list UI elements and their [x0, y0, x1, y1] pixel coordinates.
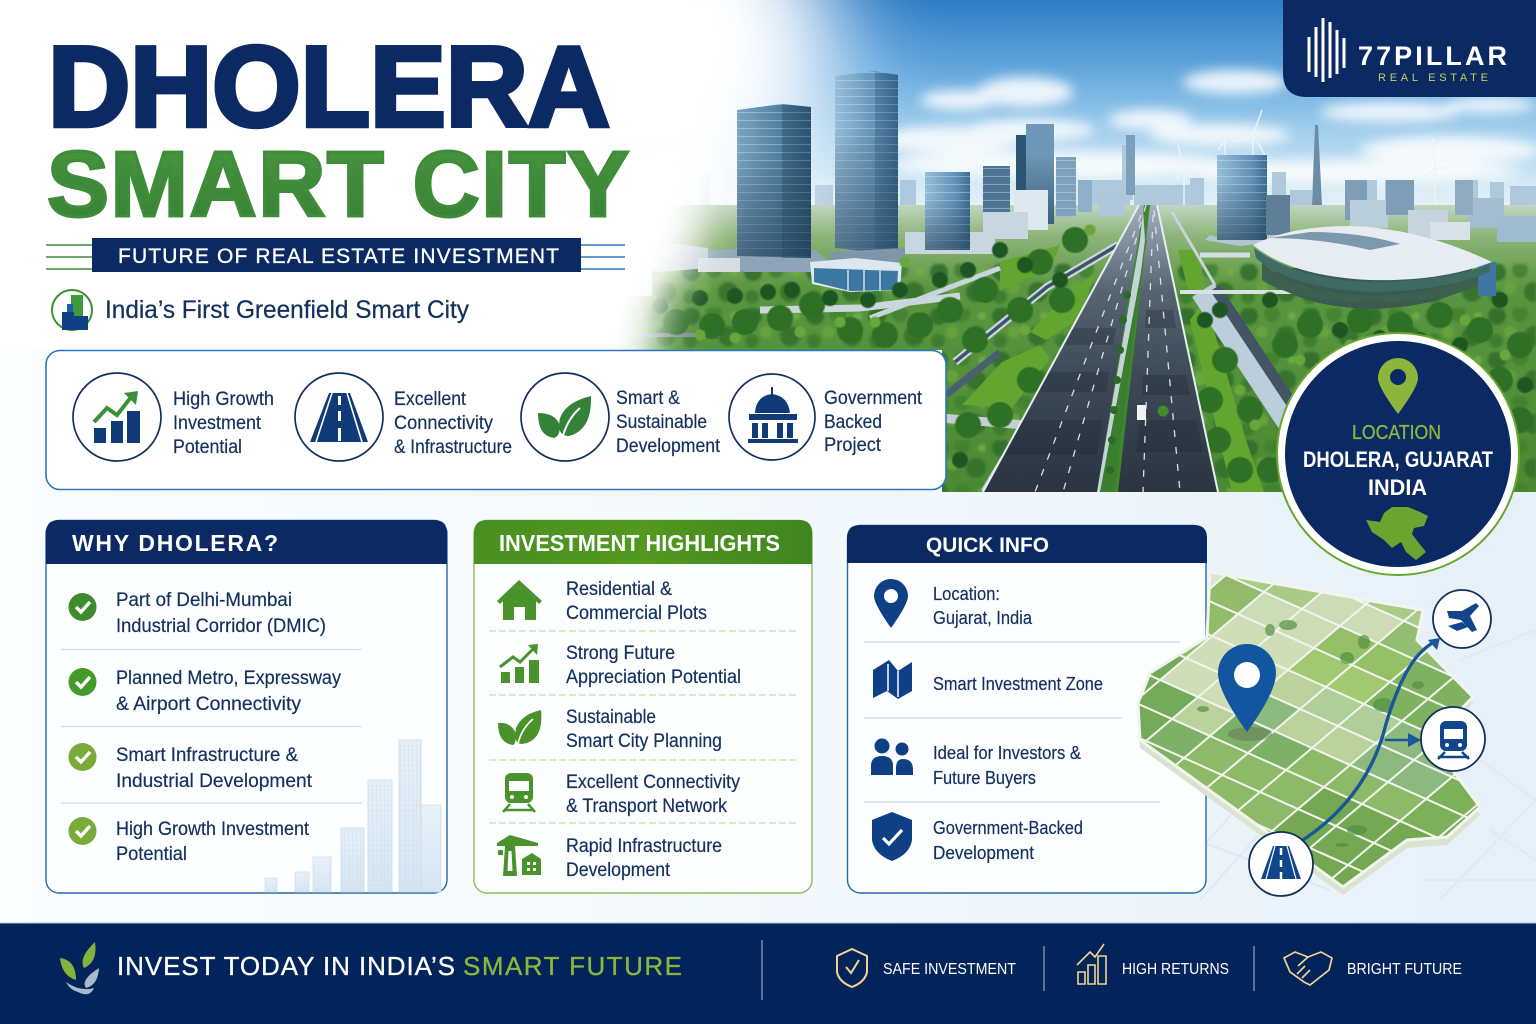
item: transport: Excellent Connectivity [566, 772, 740, 793]
item: growth [68, 817, 310, 865]
item: sustainable: Sustainable [566, 707, 656, 728]
feature: high growth [73, 373, 274, 461]
sky fade to white [600, 0, 911, 205]
footer call to action [117, 951, 682, 981]
item: investors: Ideal for Investors & [933, 743, 1081, 763]
feature: high growth: Potential [173, 437, 242, 458]
item: metro [68, 668, 341, 715]
item: government: Government-Backed [933, 818, 1083, 838]
item: plots: Commercial Plots [566, 603, 707, 624]
header [847, 525, 1207, 563]
logo [1283, 0, 1536, 97]
logo text: 77PILLAR [1358, 41, 1507, 71]
title [47, 24, 629, 236]
logo text [1358, 41, 1507, 84]
Gujarat outline [1366, 507, 1428, 560]
feature: government: Project [824, 435, 882, 456]
item: government: Development [933, 843, 1034, 863]
item: infrastructure [68, 743, 313, 792]
map pin [1218, 644, 1276, 741]
map base [1138, 645, 1480, 895]
header [474, 520, 812, 564]
item: appreciation: Strong Future [566, 643, 675, 664]
item: DMIC: Industrial Corridor (DMIC) [116, 616, 326, 637]
road badge [1249, 832, 1313, 896]
item: appreciation: Appreciation Potential [566, 667, 741, 688]
feature: sustainable [521, 373, 721, 461]
item: location: Gujarat, India [933, 608, 1033, 628]
header: INVESTMENT HIGHLIGHTS [499, 530, 780, 556]
arrowheads [1408, 638, 1440, 747]
subtitle with city icon: India’s First Greenfield Smart City [105, 296, 469, 324]
foreground trees [660, 230, 1525, 470]
tree canopy texture [600, 262, 1536, 492]
panel: quick info [847, 525, 1207, 893]
road shadow bands [1014, 310, 1199, 438]
feature: government [729, 374, 923, 460]
item: metro: Planned Metro, Expressway [116, 668, 341, 689]
location text: DHOLERA, GUJARAT [1303, 447, 1493, 472]
badge: high returns [1077, 944, 1229, 984]
dividers [61, 650, 362, 803]
badge: bright future [1284, 952, 1462, 985]
item: infrastructure: Industrial Development [116, 771, 313, 792]
ground [600, 205, 1536, 492]
item: government [872, 812, 1083, 863]
location text: INDIA [1368, 475, 1427, 500]
item: infrastructure: Smart Infrastructure & [116, 745, 298, 766]
panel: key features [46, 350, 946, 490]
item: metro: & Airport Connectivity [116, 694, 302, 715]
feature: connectivity: & Infrastructure [394, 437, 512, 458]
panel: why dholera [46, 520, 447, 893]
feature: sustainable: Development [616, 436, 721, 457]
badge: safe investment: SAFE INVESTMENT [883, 961, 1016, 978]
map outline [1138, 572, 1480, 887]
faint background roads [1170, 630, 1536, 900]
subtitle with city icon [52, 290, 469, 330]
item: zone: Smart Investment Zone [933, 674, 1103, 694]
item: plots [497, 579, 707, 624]
footer call to action: INVEST TODAY IN INDIA’S [117, 951, 455, 981]
dividers [864, 642, 1180, 802]
location pin [1378, 358, 1418, 414]
clouds [880, 70, 1536, 184]
item: plots: Residential & [566, 579, 672, 600]
feature: government: Backed [824, 412, 882, 433]
logo pillars [1309, 18, 1344, 82]
low buildings [636, 244, 740, 296]
footer call to action: SMART FUTURE [463, 951, 682, 981]
airport badge [1433, 590, 1491, 648]
map plots [1140, 574, 1478, 885]
feature: connectivity: Connectivity [394, 413, 493, 434]
tower one [708, 104, 828, 272]
badge: safe investment [837, 949, 1016, 987]
feature: connectivity [295, 373, 512, 461]
item: DMIC: Part of Delhi-Mumbai [116, 590, 292, 611]
side roads [640, 212, 1300, 492]
feature: high growth: High Growth [173, 389, 274, 410]
dashed dividers [489, 631, 797, 823]
white top left area [0, 0, 640, 350]
item: infrastructure [497, 835, 722, 881]
item: transport [503, 772, 740, 817]
location text: LOCATION [1352, 422, 1441, 444]
feature: high growth: Investment [173, 413, 262, 434]
sky [734, 0, 1536, 205]
lawns [962, 245, 1264, 492]
header: QUICK INFO [926, 534, 1049, 557]
footer leaf icon [60, 942, 99, 994]
panel: investment highlights [474, 520, 812, 893]
badge: bright future: BRIGHT FUTURE [1347, 961, 1462, 978]
item: infrastructure: Development [566, 860, 671, 881]
logo text: REAL ESTATE [1378, 72, 1488, 84]
location badge [1277, 333, 1519, 575]
item: sustainable [498, 707, 722, 752]
trees on map [1197, 620, 1424, 847]
connection route [1303, 641, 1436, 840]
train badge [1421, 707, 1485, 771]
stadium [1253, 226, 1496, 309]
item: growth: High Growth Investment [116, 819, 310, 840]
header [46, 520, 447, 564]
mid city buildings [905, 124, 1135, 254]
tower two [810, 71, 905, 292]
hero photo: smart city skyline and highway [624, 0, 1536, 492]
feature: connectivity: Excellent [394, 389, 467, 410]
location map [1136, 570, 1492, 897]
item: appreciation [500, 643, 741, 688]
feature: government: Government [824, 388, 923, 409]
header: WHY DHOLERA? [72, 530, 278, 556]
left ground fade [600, 182, 731, 350]
item: growth: Potential [116, 844, 187, 865]
footer dividers [762, 940, 1254, 1000]
item: transport: & Transport Network [566, 796, 727, 817]
tagline banner [46, 238, 625, 272]
item: investors [871, 738, 1081, 788]
item: location: Location: [933, 584, 1000, 604]
location text [1303, 422, 1493, 500]
title: SMART CITY [47, 132, 629, 236]
item: DMIC [68, 590, 326, 637]
distant skyline [708, 145, 1536, 205]
badge: high returns: HIGH RETURNS [1122, 961, 1229, 978]
item: zone [873, 660, 1103, 699]
footer band [0, 923, 1536, 1024]
feature: sustainable: Sustainable [616, 412, 707, 433]
item: infrastructure: Rapid Infrastructure [566, 836, 722, 857]
feature: sustainable: Smart & [616, 388, 680, 409]
tagline banner: FUTURE OF REAL ESTATE INVESTMENT [118, 245, 559, 268]
wind turbines [1176, 110, 1436, 205]
item: sustainable: Smart City Planning [566, 731, 722, 752]
main highway [983, 205, 1218, 492]
title: DHOLERA [48, 24, 610, 151]
item: investors: Future Buyers [933, 768, 1036, 788]
city sketch [265, 740, 441, 892]
item: location [874, 579, 1033, 628]
